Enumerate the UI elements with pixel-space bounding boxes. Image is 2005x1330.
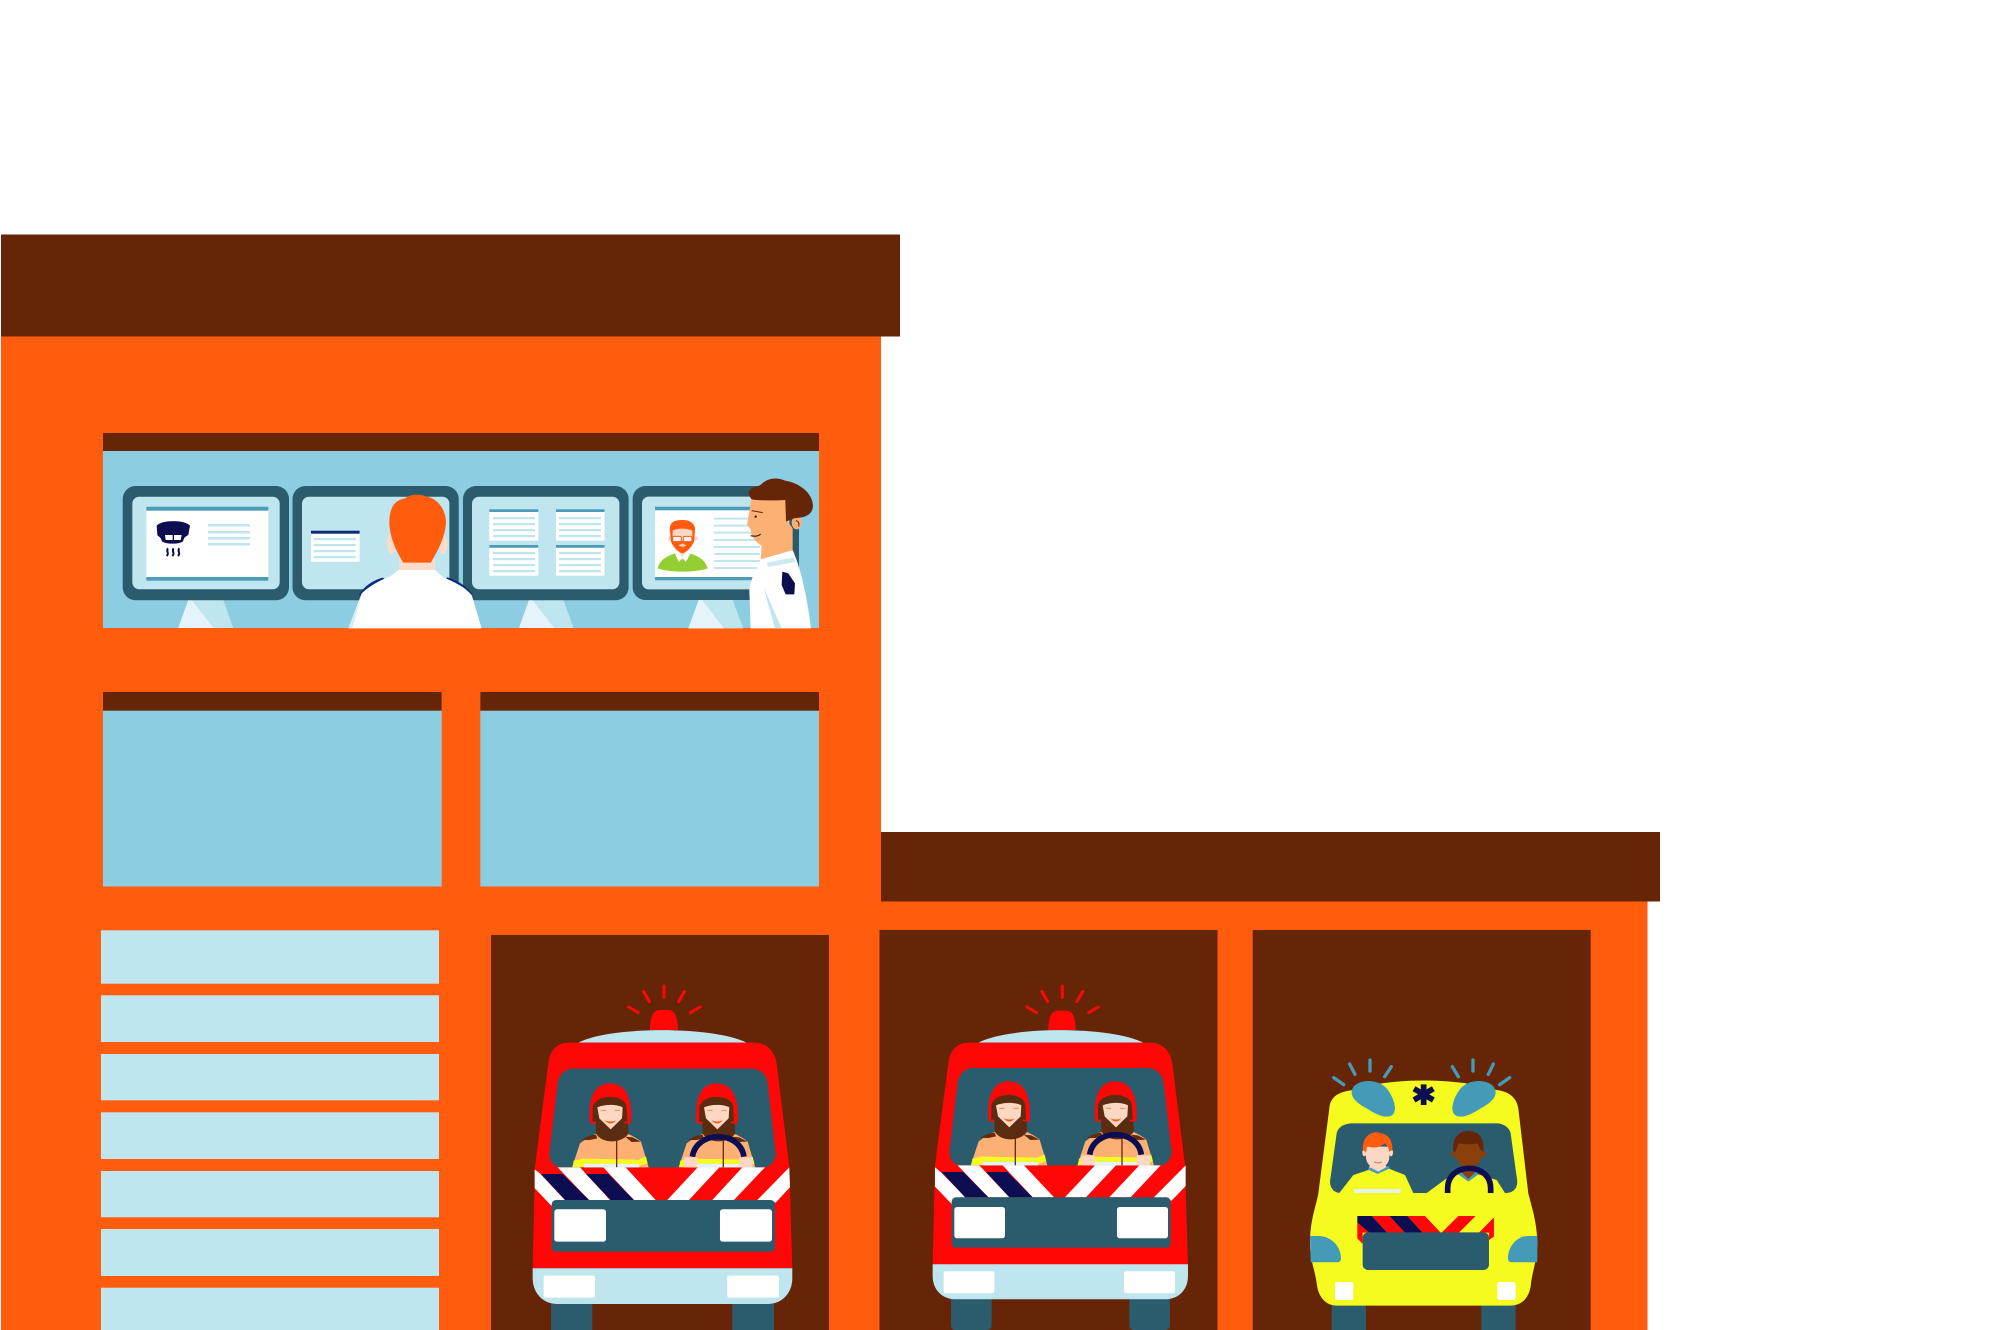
building: garage extension body bbox=[881, 901, 1648, 1330]
chevron stripes bbox=[935, 1165, 1186, 1204]
blue lights with rays bbox=[1334, 1060, 1510, 1117]
windshield bbox=[549, 1069, 776, 1167]
garage door opening 2 bbox=[880, 930, 1218, 1330]
icon: bearded man avatar bbox=[658, 520, 708, 572]
firefighter driver bbox=[679, 1083, 755, 1167]
monitor 4: personnel profile bbox=[633, 486, 799, 628]
fire truck 1 bbox=[533, 986, 792, 1330]
fog lights bbox=[944, 1271, 1175, 1293]
monitor 1: smoke detector bbox=[123, 486, 289, 628]
paramedic driver bbox=[1427, 1131, 1505, 1193]
steering wheel bbox=[684, 1137, 753, 1167]
ambulance bbox=[1310, 1060, 1537, 1330]
person: operator from behind bbox=[348, 495, 482, 628]
fog lights bbox=[544, 1276, 779, 1298]
cab roof bbox=[578, 1030, 747, 1043]
fire truck 2 bbox=[933, 986, 1188, 1330]
rescue stripes bbox=[1357, 1216, 1494, 1244]
monitor 2 bbox=[292, 486, 459, 600]
grille bbox=[552, 1200, 775, 1252]
cab body bbox=[933, 1043, 1188, 1265]
chevron stripes bbox=[535, 1167, 790, 1206]
roof beacon bbox=[1027, 986, 1098, 1030]
headlights bbox=[554, 1209, 772, 1242]
wheels bbox=[951, 1298, 1170, 1330]
building: main tower body bbox=[1, 336, 881, 1330]
roof beacon bbox=[629, 986, 700, 1030]
grille bbox=[1363, 1232, 1489, 1270]
body bbox=[1310, 1080, 1537, 1306]
headlights bbox=[954, 1207, 1168, 1238]
cab body bbox=[533, 1043, 792, 1268]
panel: left middle window bbox=[103, 692, 442, 886]
window awning bbox=[103, 433, 819, 451]
side windows bbox=[1310, 1236, 1537, 1262]
garage door opening 3 bbox=[1253, 930, 1591, 1330]
grille bbox=[952, 1197, 1171, 1248]
panel: right middle window bbox=[480, 692, 819, 886]
firefighter driver bbox=[1077, 1081, 1154, 1165]
steering wheel bbox=[1081, 1135, 1150, 1165]
cab roof bbox=[978, 1030, 1143, 1043]
monitor 3: documents bbox=[463, 486, 629, 628]
icon: smoke detector bbox=[157, 521, 190, 556]
garage door opening 1 bbox=[491, 935, 829, 1330]
bumper bbox=[933, 1264, 1188, 1299]
building: tower roof bbox=[1, 234, 900, 336]
windshield bbox=[1330, 1123, 1517, 1193]
paramedic passenger bbox=[1339, 1132, 1413, 1193]
wheels bbox=[551, 1303, 774, 1330]
panel: louvred entrance bbox=[101, 930, 439, 1330]
firefighter passenger bbox=[971, 1081, 1047, 1165]
icon: star of life bbox=[1414, 1084, 1433, 1105]
headlights bbox=[1335, 1282, 1516, 1300]
person: officer in profile bbox=[747, 478, 813, 628]
wheels bbox=[1332, 1305, 1516, 1330]
firefighter passenger bbox=[572, 1083, 649, 1167]
bumper bbox=[533, 1268, 792, 1304]
windshield bbox=[949, 1068, 1172, 1165]
panel: control room window bbox=[103, 433, 819, 628]
building: garage roof bbox=[881, 832, 1660, 902]
